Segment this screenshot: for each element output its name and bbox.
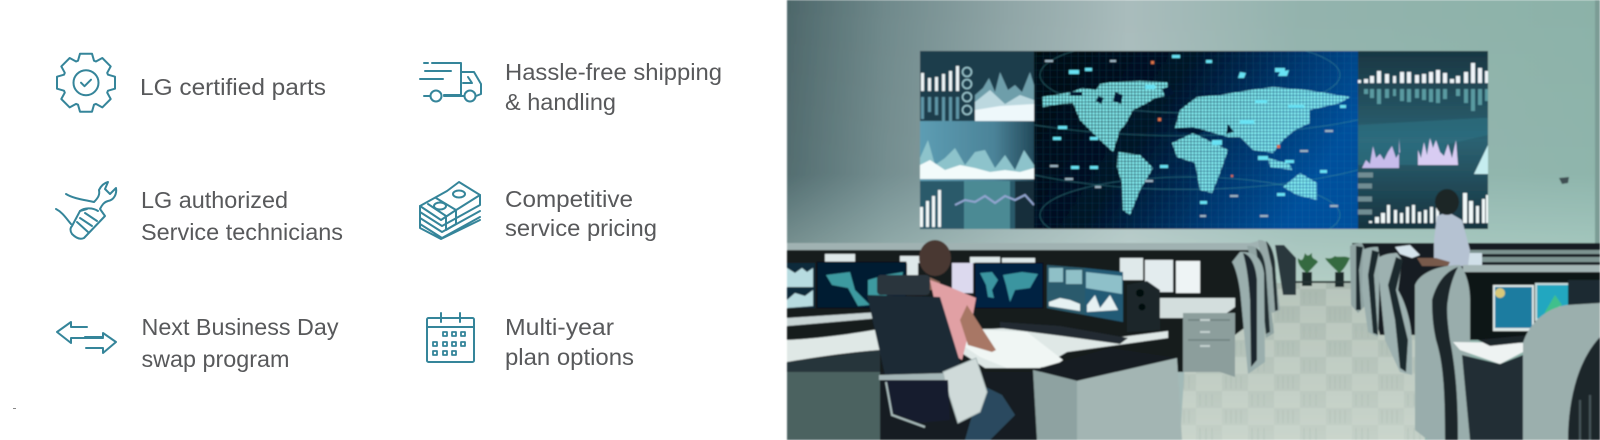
benefit: Hassle-free shipping and handling — [420, 59, 722, 115]
monitors on operator desk — [787, 262, 1160, 332]
near right end panel — [1523, 303, 1600, 440]
under-desk cabinet — [1033, 348, 1182, 440]
right back cubicles — [1350, 243, 1600, 375]
text: Hassle-free shipping and handling: Hassle-free shipping — [505, 59, 722, 85]
office chair — [867, 275, 987, 427]
benefit: Next Business Day swap program — [57, 314, 339, 372]
right side of back desk — [1160, 298, 1235, 377]
benefit: LG certified parts — [57, 54, 326, 112]
panel: control room photograph — [787, 0, 1600, 440]
icon: gear with check — [57, 54, 115, 112]
video wall — [919, 50, 1489, 230]
icon: swap arrows — [57, 322, 116, 353]
text: Hassle-free shipping and handling: & handling — [505, 89, 616, 115]
seated operator — [919, 240, 1015, 440]
dark base below operator desk — [880, 368, 1037, 440]
text: Competitive service pricing — [505, 186, 657, 241]
world map dots — [1042, 81, 1350, 215]
icon: calendar — [427, 313, 474, 362]
operator desk surface — [787, 312, 1168, 440]
back wall desks left — [787, 240, 1296, 372]
text: Multi-year plan options — [505, 314, 634, 370]
carpet floor — [1180, 283, 1425, 440]
standing person with papers — [1395, 189, 1482, 266]
map data labels — [1053, 55, 1346, 204]
text: Multi-year plan options: plan options — [505, 344, 634, 370]
icon: stack of banknotes — [420, 182, 480, 239]
screen centre panel: world map — [1032, 50, 1360, 230]
text: Next Business Day swap program: Next Business Day — [142, 314, 339, 340]
benefit: Competitive service pricing — [420, 182, 657, 241]
panel: service benefits — [56, 54, 722, 372]
text: Hassle-free shipping and handling — [505, 59, 722, 115]
text: Next Business Day swap program — [142, 314, 339, 372]
screen right panel: charts — [1358, 51, 1488, 229]
map lakes and gaps — [1070, 86, 1234, 134]
text: Multi-year plan options: Multi-year — [505, 314, 614, 340]
text: Next Business Day swap program: swap program — [142, 346, 290, 372]
benefit: Multi-year plan options — [427, 313, 634, 370]
back white monitors — [825, 254, 1200, 293]
text: Competitive service pricing: service pricing — [505, 215, 657, 241]
near right cubicle — [1415, 265, 1600, 440]
text: Competitive service pricing: Competitive — [505, 186, 633, 212]
text: LG authorized Service technicians: Service technicians — [141, 219, 343, 245]
icon: delivery truck — [420, 63, 481, 102]
wall — [787, 0, 1600, 440]
benefit: LG authorized service technicians — [56, 182, 343, 245]
icon: hand holding wrench — [56, 182, 116, 239]
plants — [1296, 253, 1352, 287]
text: LG authorized Service technicians — [141, 187, 343, 245]
text: LG authorized Service technicians: LG authorized — [141, 187, 288, 213]
small mark — [13, 408, 16, 409]
screen left panel: charts — [920, 51, 1034, 229]
near end panel left — [1232, 252, 1265, 374]
text: LG certified parts: LG certified parts — [140, 74, 326, 100]
security camera — [1559, 177, 1569, 184]
